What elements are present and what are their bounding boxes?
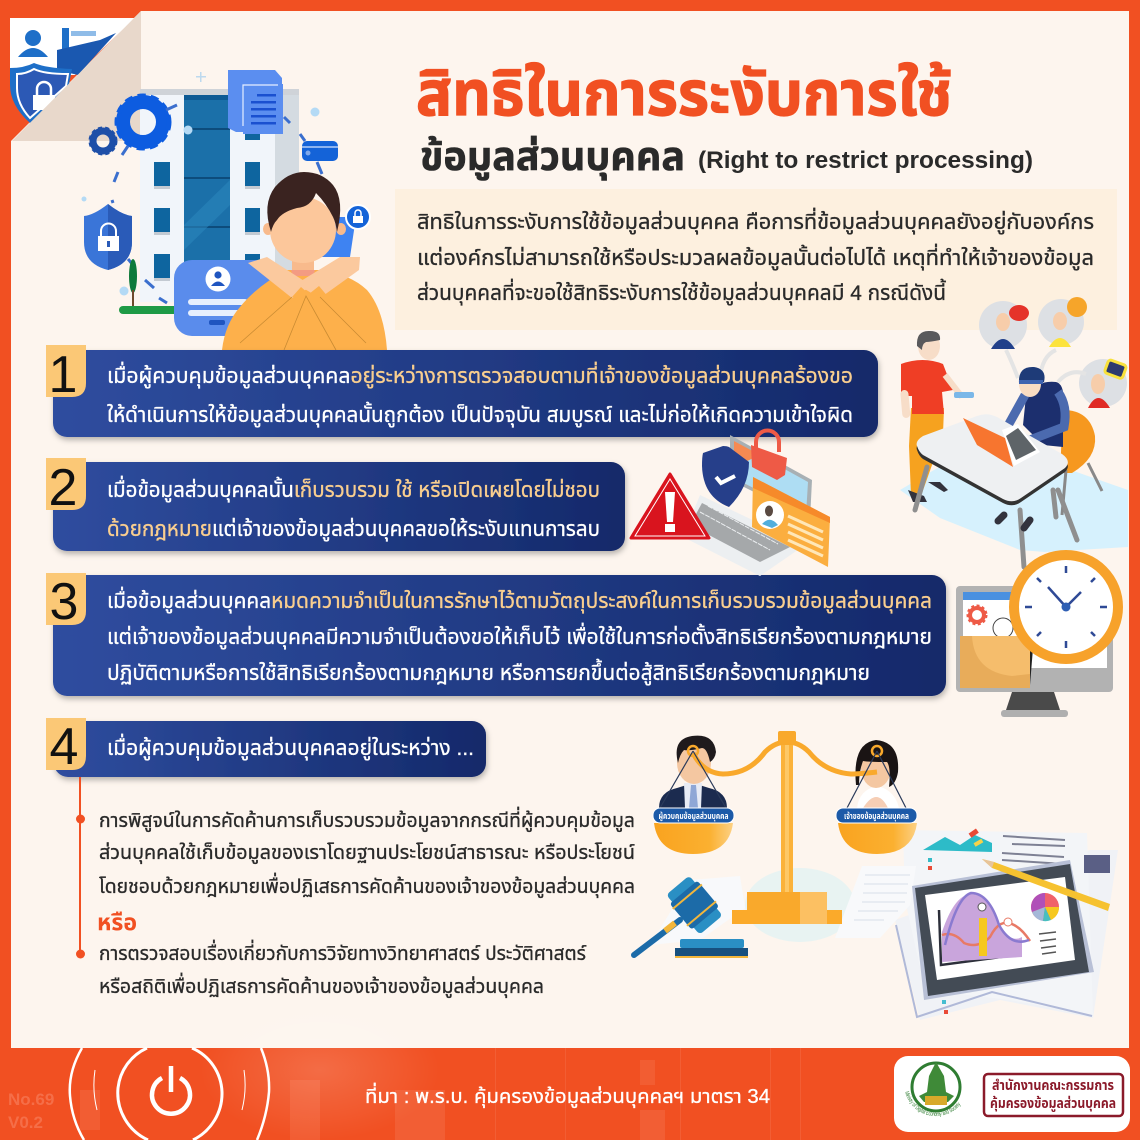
text: case 3: แต่เจ้าของข้อมูลส่วนบุคคลมีความจำเป็นต้องขอให้เก็บไว้ เพื่อใช้ในการก่อตั้งสิทธิเรียกร้องตามกฎหมาย [107, 622, 932, 650]
seated man [1005, 367, 1065, 447]
version label: No.69 [8, 1090, 54, 1109]
icon: power rings [70, 1048, 269, 1140]
icon: lock [751, 430, 787, 480]
illustration: person crossing arms [222, 172, 387, 350]
icon: blue folder with lock [320, 205, 370, 257]
standing man [900, 331, 974, 502]
icon: warning triangle [631, 474, 709, 538]
panel: case 2 [46, 458, 625, 551]
intro text panel: แต่องค์กรไม่สามารถใช้หรือประมวลผลข้อมูลนั้นต่อไปได้ เหตุที่ทำให้เจ้าของข้อมูล [417, 243, 1094, 271]
illustration: monitor with folder and clock [956, 555, 1118, 717]
icon: profile card [752, 477, 830, 567]
text: case 2: เมื่อข้อมูลส่วนบุคคลนั้นเก็บรวบรวม ใช้ หรือเปิดเผยโดยไม่ชอบ [107, 475, 600, 503]
pencil [982, 859, 1110, 911]
chair [1060, 410, 1095, 473]
avatars with data [979, 297, 1127, 408]
list: case 4 conditions: หรือสถิติเพื่อปฏิเสธการคัดค้านของเจ้าของข้อมูลส่วนบุคคล [99, 972, 544, 999]
list: case 4 conditions [76, 777, 635, 999]
table [915, 414, 1077, 567]
corner icon: folded page with data protection [0, 0, 141, 141]
chart in tablet [939, 893, 1030, 965]
pie chart [1031, 893, 1059, 921]
right pan with label: เจ้าของข้อมูลส่วนบุคคล [844, 810, 909, 821]
right pan with label [836, 808, 917, 854]
text: case 1: เมื่อผู้ควบคุมข้อมูลส่วนบุคคลอยู่ระหว่างการตรวจสอบตามที่เจ้าของข้อมูลส่วนบุคคลร้องขอ [107, 361, 853, 389]
gear icons [968, 606, 1013, 638]
list: case 4 conditions: ส่วนบุคคลใช้เก็บข้อมูลของเราโดยฐานประโยชน์สาธารณะ หรือประโยชน์ [99, 841, 635, 865]
logo: office name: สำนักงานคณะกรรมการ [992, 1077, 1114, 1093]
logos [894, 1056, 1130, 1132]
clock [1014, 555, 1118, 659]
panel: case 4 [46, 718, 486, 777]
label: or: หรือ [97, 909, 137, 935]
logo: office name [984, 1074, 1123, 1116]
text: case 3: ปฏิบัติตามหรือการใช้สิทธิเรียกร้องตามกฎหมาย หรือการยกขึ้นต่อสู้สิทธิเรียกร้องตามกฎหมาย [107, 658, 870, 686]
right figure: data owner [855, 740, 899, 808]
footer [8, 1046, 1130, 1140]
list: case 4 conditions: การพิสูจน์ในการคัดค้านการเก็บรวบรวมข้อมูลจากกรณีที่ผู้ควบคุมข้อมูล [99, 806, 635, 833]
panel: case 1 [46, 345, 878, 437]
icon: shield with padlock [84, 204, 132, 270]
left pan with label: ผู้ควบคุมข้อมูลส่วนบุคคล [658, 810, 728, 821]
logo: office name: คุ้มครองข้อมูลส่วนบุคคล [990, 1095, 1116, 1113]
icon: login card [174, 260, 274, 336]
gavel [634, 873, 748, 958]
text: case 2: ด้วยกฎหมายแต่เจ้าของข้อมูลส่วนบุคคลขอให้ระงับแทนการลบ [107, 517, 600, 542]
title: ข้อมูลส่วนบุคคล [420, 134, 685, 181]
text: case 3 [107, 586, 932, 686]
title [416, 60, 1033, 181]
version label: V0.2 [8, 1113, 43, 1132]
badge: number 4: 4 [50, 718, 78, 776]
text: case 3: เมื่อข้อมูลส่วนบุคคลหมดความจำเป็นในการรักษาไว้ตามวัตถุประสงค์ในการเก็บรวบรวมข้อมูลส่วนบุคคล [107, 586, 932, 614]
illustration: people at table with laptop [900, 297, 1128, 567]
text: case 1 [107, 361, 853, 428]
illustration: paper sheets behind tablet [895, 828, 1118, 1020]
icon: small gear [90, 128, 116, 154]
icon: shield [702, 446, 749, 507]
folder [960, 636, 1034, 688]
badge: number 3: 3 [50, 573, 78, 631]
text: case 4: เมื่อผู้ควบคุมข้อมูลส่วนบุคคลอยู่ในระหว่าง ... [107, 733, 474, 761]
icon: large gear [117, 96, 169, 148]
list: case 4 conditions: การตรวจสอบเรื่องเกี่ยวกับการวิจัยทางวิทยาศาสตร์ ประวัติศาสตร์ [99, 939, 587, 965]
logo: ministry emblem [905, 1062, 962, 1117]
illustration: balance scale with controller and data owner [634, 731, 917, 958]
arms crossed [240, 257, 366, 350]
intro text panel [395, 189, 1117, 330]
scale beam and pole [660, 731, 906, 924]
logo: ministry emblem: Ministry of Digital Economy and Society [905, 1091, 961, 1117]
laptop [963, 418, 1040, 467]
intro text panel: สิทธิในการระงับการใช้ข้อมูลส่วนบุคคล คือการที่ข้อมูลส่วนบุคคลยังอยู่กับองค์กร [417, 207, 1094, 235]
source text: ที่มา : พ.ร.บ. คุ้มครองข้อมูลส่วนบุคคลฯ มาตรา 34 [365, 1082, 770, 1109]
text: case 1: ให้ดำเนินการให้ข้อมูลส่วนบุคคลนั้นถูกต้อง เป็นปัจจุบัน สมบูรณ์ และไม่ก่อให้เกิดความเข้าใจผิด [107, 401, 853, 428]
version label [8, 1090, 54, 1132]
title: (Right to restrict processing) [698, 147, 1033, 174]
icon: documents [228, 70, 283, 134]
left pan with label [653, 808, 734, 854]
badge: number 1: 1 [49, 346, 77, 404]
title: สิทธิในการระงับการใช้ [416, 60, 952, 129]
illustration: tablet with charts and pencil [912, 859, 1110, 1000]
panel: case 3 [46, 573, 946, 696]
left figure: controller [659, 736, 727, 808]
badge: number 2: 2 [49, 459, 77, 517]
icon: tree and ground [119, 259, 179, 314]
illustration: warning, laptop, lock and profile card [631, 430, 830, 576]
text: case 2 [107, 475, 600, 542]
intro text panel: ส่วนบุคคลที่จะขอใช้สิทธิระงับการใช้ข้อมูลส่วนบุคคลมี 4 กรณีดังนี้ [417, 278, 946, 306]
icon: credit card [302, 141, 338, 161]
illustration: office building with security icons [82, 70, 370, 336]
list: case 4 conditions: โดยชอบด้วยกฎหมายเพื่อปฏิเสธการคัดค้านของเจ้าของข้อมูลส่วนบุคคล [99, 872, 635, 899]
